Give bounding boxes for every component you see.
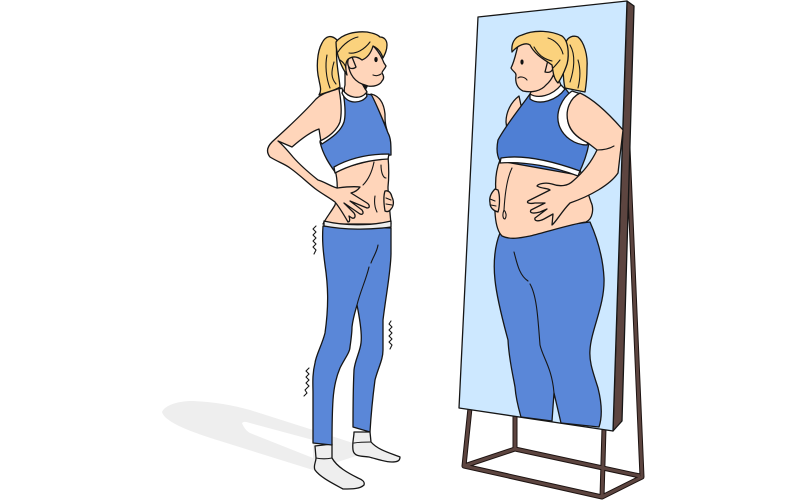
woman: slim real body — [268, 32, 400, 489]
far shoulder trim — [371, 94, 387, 130]
waistband — [324, 221, 391, 229]
reflection hair — [512, 31, 568, 83]
face — [348, 45, 386, 86]
tremble lines by calf — [304, 368, 309, 396]
ear — [348, 57, 356, 68]
near arm and hand — [268, 88, 369, 222]
mirror stand — [464, 100, 642, 497]
ponytail strands — [326, 55, 336, 88]
far hand — [384, 191, 393, 212]
crop top — [320, 88, 391, 172]
reflection belly — [495, 160, 593, 238]
reflection pants creases — [514, 252, 554, 393]
reflection eye and mouth — [518, 59, 527, 80]
sock cuff line — [316, 442, 371, 459]
floor shadow — [162, 401, 356, 470]
reflection ponytail — [563, 36, 587, 92]
top hem band — [334, 154, 389, 173]
belly lines — [363, 162, 386, 212]
neck — [344, 60, 367, 99]
mirror glass — [459, 1, 627, 431]
ponytail — [317, 37, 340, 95]
collar — [342, 90, 367, 102]
armhole trim — [320, 88, 345, 144]
reflection elbow crease — [597, 146, 614, 150]
reflection far hand — [490, 189, 500, 212]
leggings — [313, 226, 391, 445]
tremble lines by hip — [313, 226, 316, 254]
mirror frame side — [613, 1, 634, 431]
reflection front arm and hand — [527, 93, 623, 225]
reflection arm strap — [558, 91, 588, 145]
reflection pants — [494, 222, 604, 427]
far sock — [353, 432, 400, 462]
reflection face — [511, 42, 556, 92]
hair — [336, 32, 387, 75]
mirror — [459, 1, 634, 431]
reflection: larger body — [490, 31, 623, 427]
eye and smile — [373, 57, 381, 76]
hair strands — [338, 37, 370, 68]
reflection hair strands — [534, 38, 580, 88]
chin shadow — [361, 83, 368, 90]
reflection crop top — [497, 88, 589, 175]
reflection belly lines — [503, 168, 512, 219]
tremble lines by thigh — [389, 321, 392, 349]
reflection collar — [530, 85, 565, 102]
reflection neck — [530, 75, 562, 97]
reflection ear — [545, 60, 553, 72]
reflection back arm — [506, 96, 522, 130]
leggings crease — [357, 245, 378, 305]
near sock — [314, 444, 364, 489]
torso — [323, 156, 391, 224]
reflection top hem band — [500, 157, 580, 176]
